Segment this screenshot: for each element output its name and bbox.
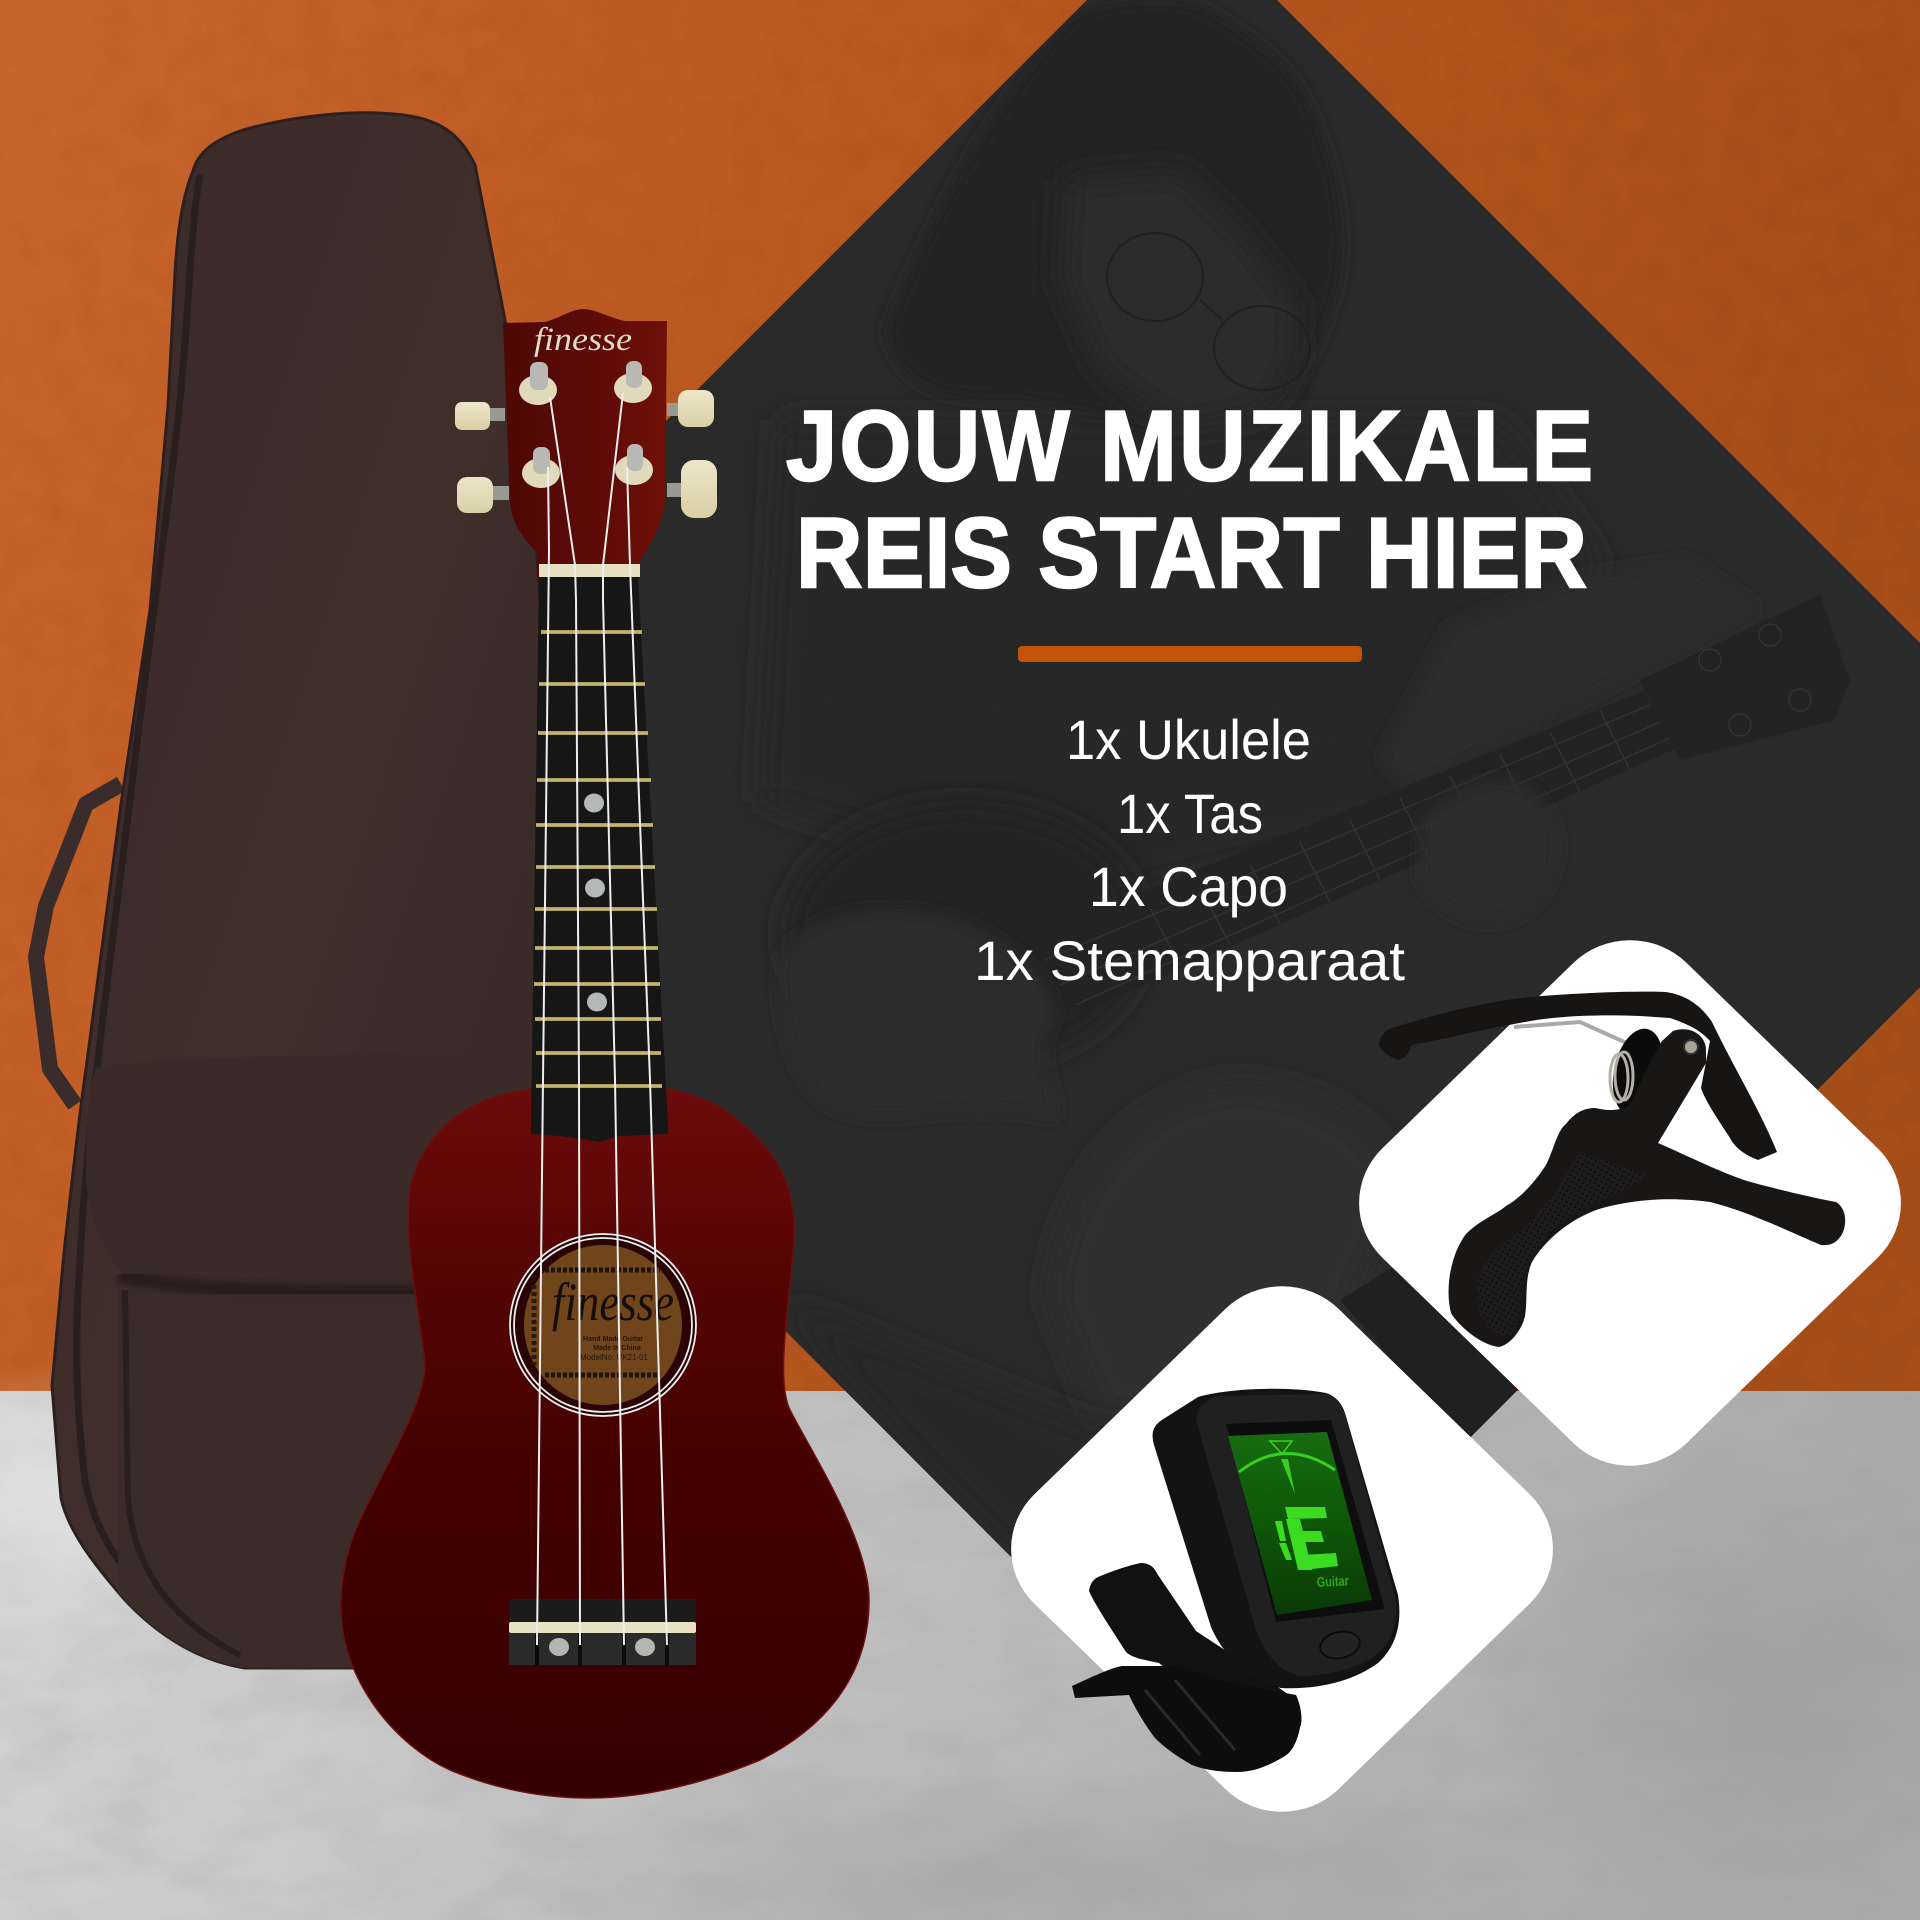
sound hole rings bbox=[510, 1234, 696, 1416]
tuner clip base bbox=[1072, 1666, 1301, 1772]
tuning posts bbox=[519, 361, 653, 488]
bag handle bbox=[36, 784, 121, 1105]
capo grip body bbox=[1449, 1029, 1845, 1347]
icon: clip-on tuner bbox=[1072, 1389, 1399, 1772]
tuner green LCD bbox=[1228, 1432, 1372, 1615]
tuner clip paddle bbox=[1089, 1563, 1296, 1700]
contents list bbox=[974, 708, 1405, 992]
watermark: light shirt sleeve bbox=[1380, 560, 1760, 790]
capo top lever bbox=[1379, 992, 1777, 1160]
ukulele body bbox=[341, 1089, 869, 1798]
nut bbox=[539, 564, 640, 577]
tuner note segments bbox=[1275, 1507, 1338, 1570]
capo spring bar bbox=[1514, 1022, 1651, 1054]
tuner mode label: Guitar bbox=[1316, 1572, 1350, 1590]
fretboard bbox=[531, 577, 668, 1142]
icon: capo bbox=[1379, 992, 1845, 1347]
label logo: finesse bbox=[552, 1272, 674, 1332]
watermark: fine grain bbox=[270, 0, 1920, 1730]
fret inlays bbox=[584, 794, 607, 1012]
title: REIS START HIER bbox=[796, 498, 1587, 609]
watermark: knee bbox=[1050, 1085, 1400, 1420]
tuner arc and needle bbox=[1239, 1441, 1335, 1494]
capo screw bbox=[1684, 1040, 1698, 1054]
label ornament bottom bbox=[545, 1372, 660, 1378]
label details: ModelNo: UK21-01 bbox=[580, 1353, 649, 1362]
contents list: 1x Capo bbox=[1089, 855, 1288, 918]
tuner front face bbox=[1196, 1394, 1396, 1676]
headstock logo: finesse bbox=[534, 322, 632, 358]
bag flap shadow bbox=[118, 1276, 540, 1292]
watermark: ukulele body bbox=[828, 826, 1118, 1025]
panel: tuner card bbox=[978, 1254, 1586, 1844]
panel: ukulele bbox=[341, 309, 869, 1798]
bag side zip seam bbox=[77, 175, 250, 1650]
contents list: 1x Ukulele bbox=[1066, 708, 1311, 771]
contents list: 1x Tas bbox=[1117, 782, 1263, 845]
label ornament side bbox=[532, 1285, 536, 1365]
watermark: lower right shadow band bbox=[1340, 1250, 1560, 1460]
label details: Made In China bbox=[593, 1345, 641, 1352]
ukulele headstock bbox=[503, 309, 667, 580]
watermark: glasses bbox=[1107, 233, 1310, 390]
contents list: 1x Stemapparaat bbox=[974, 929, 1405, 992]
watermark: face bbox=[1072, 188, 1284, 408]
bag main shape bbox=[52, 113, 560, 1668]
bag pocket seam bbox=[125, 1290, 240, 1655]
bag pocket flap bbox=[86, 1054, 540, 1306]
watermark: fretting hand bbox=[1420, 780, 1557, 922]
watermark: darker sweater band behind text bbox=[760, 420, 1600, 900]
label details: Hand Made Guitar bbox=[583, 1336, 643, 1343]
panel: capo card bbox=[1326, 908, 1920, 1498]
strings bbox=[537, 393, 667, 1645]
tuner clip detail bbox=[1145, 1680, 1235, 1755]
tuner screen frame bbox=[1226, 1420, 1385, 1622]
dark diamond panel with faint photo of ukulele player bbox=[638, 0, 1920, 1558]
label ornament top bbox=[545, 1268, 660, 1272]
watermark: ukulele neck with frets bbox=[1032, 691, 1677, 1013]
capo spring core bbox=[1605, 1024, 1671, 1120]
orange divider bar bbox=[1018, 646, 1362, 662]
ukulele left tuning pegs bbox=[455, 402, 509, 513]
bridge bbox=[509, 1599, 696, 1665]
watermark: ukulele headstock bbox=[1642, 624, 1812, 738]
watermark: lower shadow bbox=[780, 1300, 1300, 1730]
sound hole label bbox=[524, 1245, 682, 1405]
frets bbox=[534, 632, 662, 1086]
panel: brown gig bag bbox=[36, 113, 560, 1700]
concrete floor bbox=[0, 1360, 1920, 1920]
orange wall background bbox=[0, 0, 1920, 1395]
watermark: hair bbox=[885, 0, 1342, 430]
title: JOUW MUZIKALE bbox=[786, 391, 1593, 502]
capo textured grip bbox=[1477, 1152, 1647, 1336]
title bbox=[786, 391, 1593, 609]
bag pocket lower bbox=[118, 1290, 540, 1700]
tuner power button bbox=[1318, 1628, 1362, 1662]
tuner back shell bbox=[1153, 1389, 1399, 1688]
ukulele right tuning pegs bbox=[667, 390, 717, 518]
label details bbox=[580, 1336, 649, 1362]
watermark: strumming hand bbox=[790, 921, 1044, 1052]
capo spring coil bbox=[1610, 1052, 1633, 1102]
